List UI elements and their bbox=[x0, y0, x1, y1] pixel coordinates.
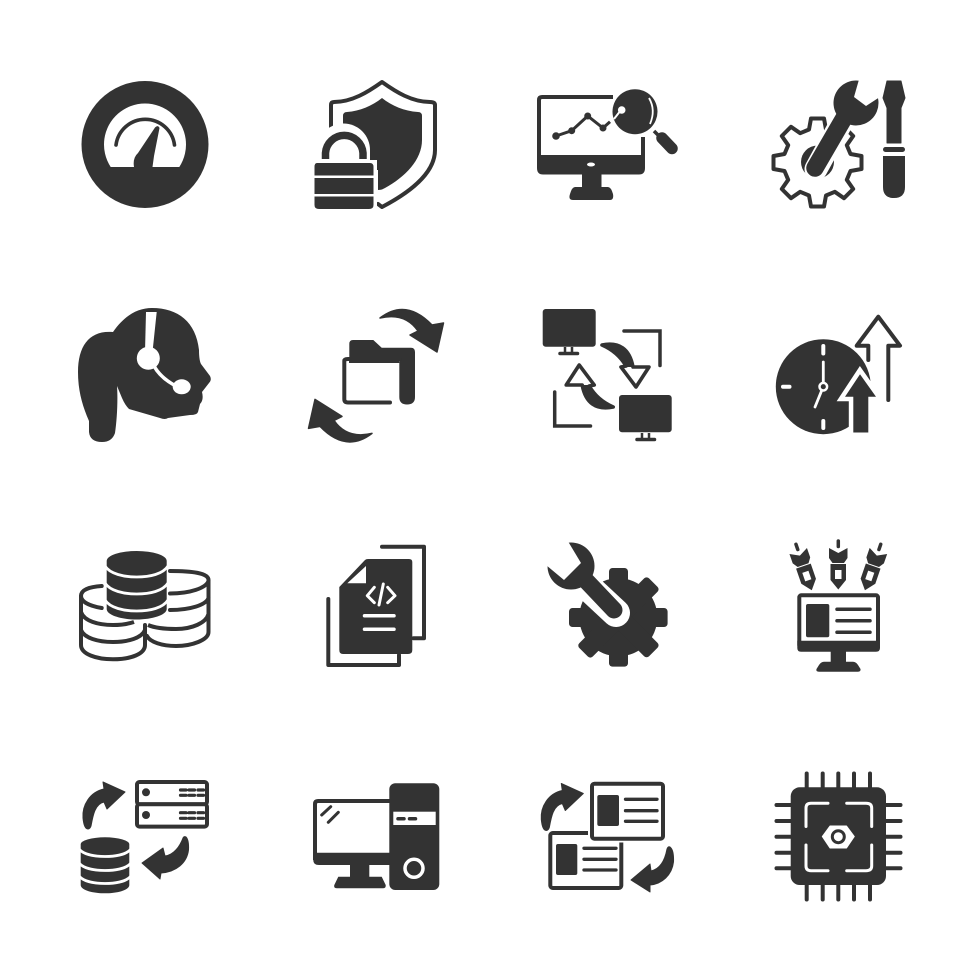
icon: code document bbox=[328, 547, 424, 665]
icon: support agent with headset bbox=[78, 308, 211, 442]
sub: right missile bbox=[856, 541, 889, 593]
icon: profile cards swap bbox=[541, 780, 674, 892]
sub: center missile bbox=[829, 541, 848, 590]
icon: two monitors exchanging data bbox=[543, 309, 672, 440]
icon: speedometer bbox=[82, 81, 208, 208]
icon: wrench and gear bbox=[540, 538, 668, 667]
icon: monitor with chart and magnifier bbox=[537, 87, 672, 200]
icon: database stacks bbox=[81, 551, 208, 659]
icon: folder with sync arrows bbox=[308, 309, 444, 442]
icon: shield with padlock bbox=[311, 82, 435, 213]
icon: server and database sync bbox=[79, 782, 207, 893]
icon: gear with wrench and screwdriver bbox=[774, 76, 905, 206]
icon: clock with rising arrows bbox=[776, 317, 900, 440]
icon: desktop computer bbox=[313, 783, 439, 890]
icon: monitor with missiles bbox=[787, 541, 889, 672]
sub: left missile bbox=[787, 541, 820, 593]
icon: processor chip with nut bbox=[776, 774, 900, 900]
